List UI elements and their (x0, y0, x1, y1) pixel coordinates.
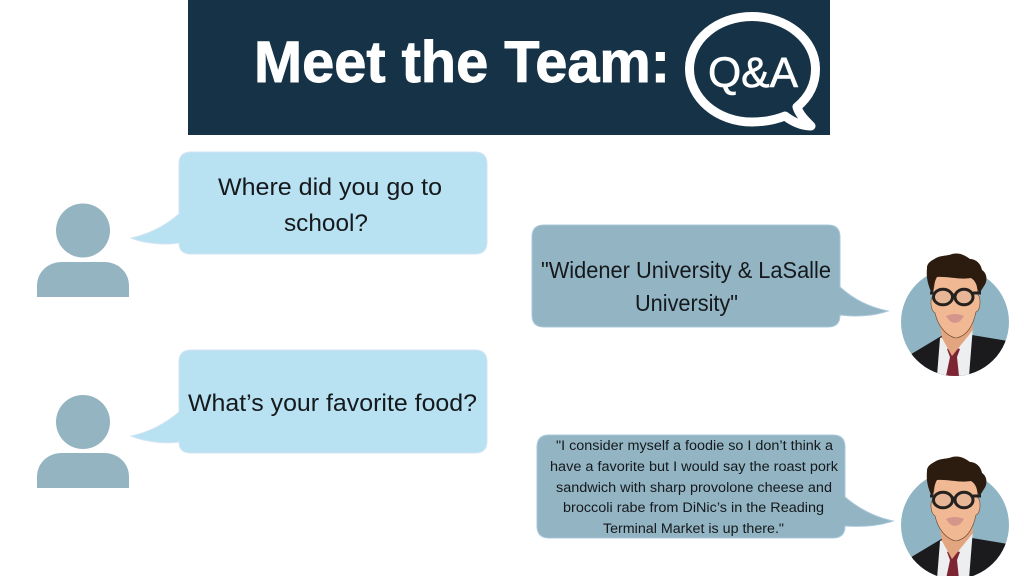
answer 1 text: University" (635, 290, 738, 316)
question 1 text (218, 174, 442, 237)
speech bubble: question 2 (131, 350, 487, 453)
answer 2 text: have a favorite but I would say the roast pork (550, 459, 838, 474)
answer 1 text: "Widener University & LaSalle (541, 257, 831, 283)
question 1 text: school? (284, 210, 368, 237)
speech bubble: answer 1 (532, 225, 888, 327)
answer 2 text: "I consider myself a foodie so I don’t think a (556, 438, 834, 453)
answer 2 text: sandwich with sharp provolone cheese and (556, 480, 832, 495)
title: Meet the Team: (254, 30, 670, 95)
answer 2 text (550, 438, 838, 536)
answer 1 text (541, 257, 831, 316)
answer 2 text: broccoli rabe from DiNic’s in the Reading (563, 500, 824, 515)
answer 2 text: Terminal Market is up there." (603, 521, 784, 536)
icon: person 2 (37, 395, 129, 488)
speech bubble: answer 2 (537, 435, 893, 538)
header banner (188, 0, 830, 135)
avatar: team member portrait 2 (900, 456, 1014, 576)
icon: person 1 (37, 204, 129, 297)
icon: Q&A speech bubble: Q&A (708, 49, 798, 97)
question 1 text: Where did you go to (218, 174, 442, 201)
question 2 text: What’s your favorite food? (188, 390, 477, 417)
avatar: team member portrait 1 (900, 253, 1014, 376)
speech bubble: question 1 (131, 152, 487, 254)
icon: Q&A speech bubble (690, 16, 816, 126)
